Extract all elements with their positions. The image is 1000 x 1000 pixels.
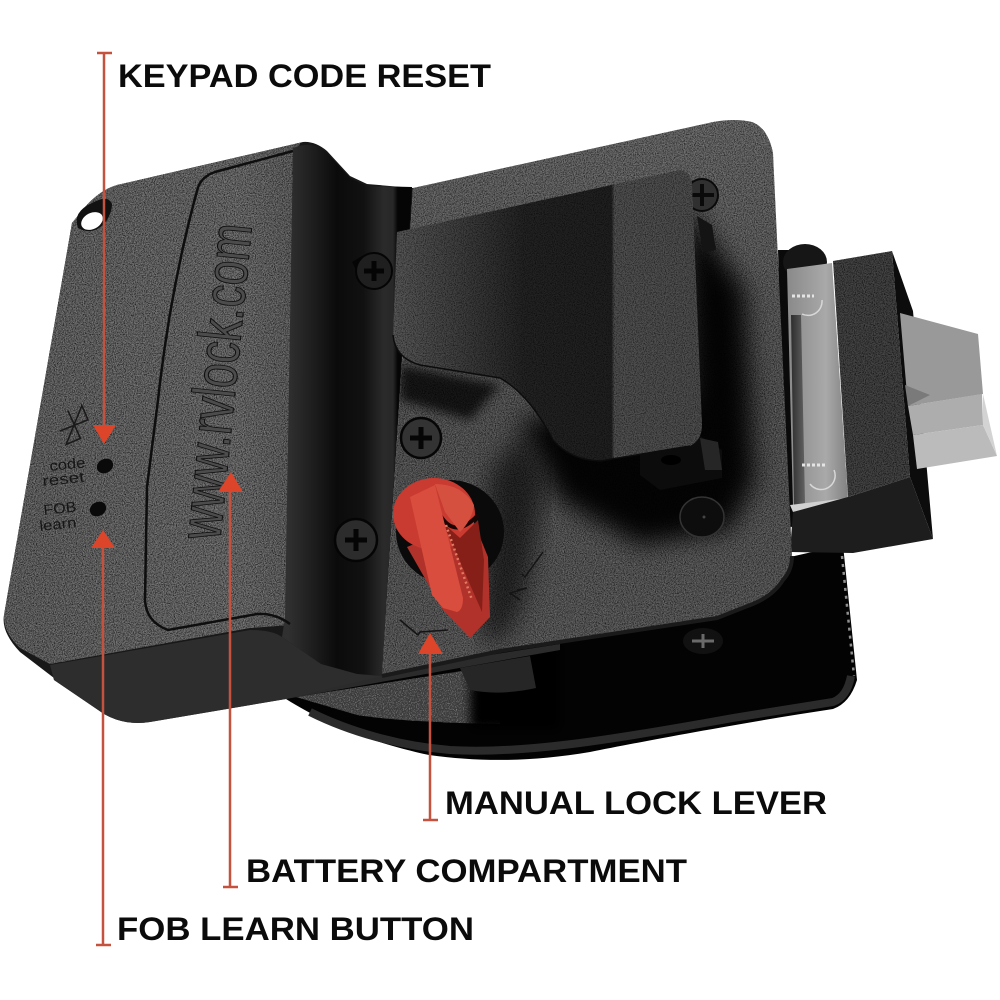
icon: bluetooth: [56, 401, 92, 449]
latch assembly: [778, 244, 997, 553]
arrow: manual lock lever: [418, 633, 443, 820]
website text: www.rvlock.com: [166, 220, 265, 543]
reset label: reset: [42, 470, 85, 490]
FOB label: FOB: [43, 500, 77, 519]
label: manual lock lever: MANUAL LOCK LEVER: [445, 785, 827, 821]
silver latch plate: [787, 263, 848, 512]
FOB learn button: [87, 499, 109, 519]
keypad body underside: [50, 628, 560, 723]
battery compartment outline: [145, 151, 293, 630]
silver latch bolt: [900, 313, 997, 469]
front plate: [380, 118, 795, 678]
code label: code: [49, 455, 86, 475]
lock device photo: [0, 118, 997, 760]
code reset button: [94, 456, 116, 476]
mounting hole: [77, 199, 112, 233]
icon: hinge screw middle: [401, 418, 441, 458]
label: keypad code reset: KEYPAD CODE RESET: [118, 58, 491, 94]
hinge band: [282, 145, 412, 676]
keypad body: [0, 140, 413, 723]
latch housing bottom face: [790, 477, 933, 553]
back mounting plate: [286, 545, 857, 760]
icon: lower right screw: [680, 497, 724, 537]
bottom face: [50, 630, 382, 723]
latch housing front face: [833, 251, 910, 497]
label: battery compartment: BATTERY COMPARTMENT: [246, 853, 687, 889]
label: fob learn button: FOB LEARN BUTTON: [117, 911, 474, 947]
black latch housing side: [892, 251, 933, 539]
arrow: fob learn button: [91, 530, 115, 945]
manual lock lever: [393, 478, 504, 638]
learn label: learn: [39, 515, 77, 535]
icon: hinge screw bottom: [335, 519, 377, 561]
latch hardware under handle: [640, 216, 722, 490]
left textured panel: [0, 140, 300, 670]
lever markings: [400, 552, 543, 635]
icon: top right screw: [686, 179, 718, 211]
arrow: battery compartment: [218, 472, 243, 887]
arrow: keypad code reset: [93, 53, 116, 444]
handle shadow: [400, 200, 755, 640]
icon: lower screw: [683, 628, 723, 654]
icon: hinge screw top: [352, 253, 392, 289]
paddle handle: [390, 165, 705, 465]
